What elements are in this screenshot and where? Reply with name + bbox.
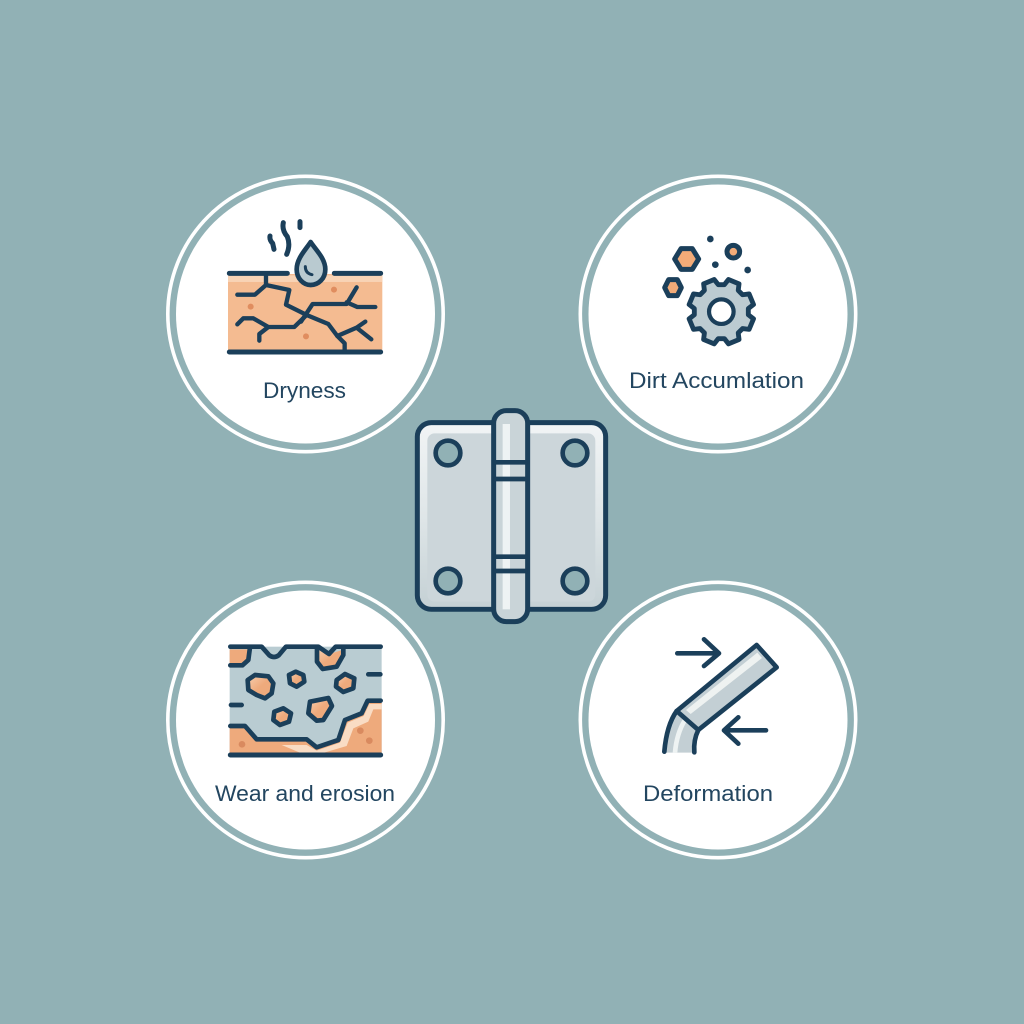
icon: gear with dirt particles <box>665 236 754 344</box>
hinge barrel <box>494 411 528 622</box>
panel: wear and erosion <box>168 582 443 858</box>
label: deformation: Deformation <box>643 781 773 806</box>
icon: eroded surface with pits <box>230 647 382 755</box>
panel: dirt accumulation <box>580 176 856 452</box>
screw holes <box>436 441 587 593</box>
hinge plate <box>417 423 606 609</box>
icon: central door hinge <box>417 411 606 622</box>
panel: deformation <box>580 582 856 858</box>
panel: dryness <box>168 176 443 452</box>
icon: bent metal bar with force arrows <box>664 639 777 753</box>
label: wear and erosion: Wear and erosion <box>215 781 395 806</box>
label: dirt accumulation: Dirt Accumlation <box>629 368 804 393</box>
icon: cracked dry skin with water drop <box>228 222 382 352</box>
label: dryness: Dryness <box>263 378 346 403</box>
